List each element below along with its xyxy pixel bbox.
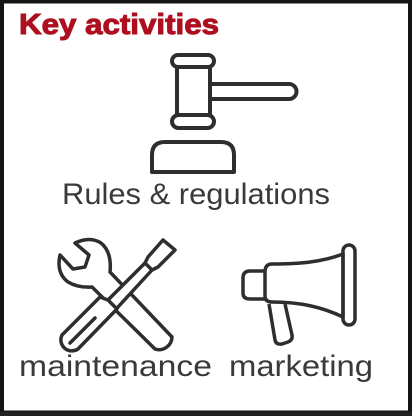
- label: rules and regulations: Rules & regulations: [62, 178, 330, 211]
- icon: wrench and screwdriver: [59, 240, 175, 351]
- title: Key activities: [19, 9, 219, 41]
- label: marketing: marketing: [229, 350, 373, 383]
- icon: gavel: [152, 55, 297, 172]
- label: maintenance: maintenance: [19, 350, 212, 383]
- icon: megaphone: [243, 245, 355, 344]
